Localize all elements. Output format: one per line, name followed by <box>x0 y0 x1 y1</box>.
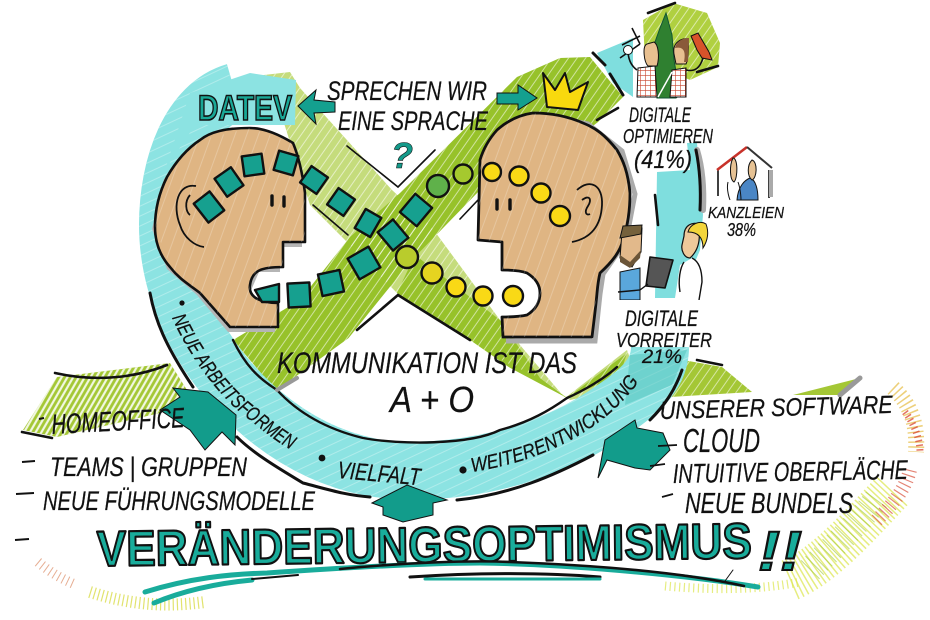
right head <box>478 113 635 341</box>
ribbon labels <box>172 300 637 491</box>
DATEV logo: DATEV <box>198 89 293 128</box>
left head nostrils <box>272 196 284 206</box>
text: digital pioneers: DIGITALE <box>625 306 698 331</box>
ribbon labels: WEITERENTWICKLUNG <box>471 375 637 472</box>
right head nostrils <box>497 200 510 209</box>
crown <box>543 73 588 110</box>
right bullet list: NEUE BUNDELS <box>685 488 853 520</box>
left bullet list: HOMEOFFICE <box>51 402 185 440</box>
text: digital pioneers <box>616 306 712 368</box>
coloured hatching backdrop <box>38 388 920 605</box>
text: digital optimists <box>623 104 713 174</box>
right bullet list: CLOUD <box>683 422 760 459</box>
right bullet list: UNSERER SOFTWARE <box>659 391 893 425</box>
arrow right to crown <box>497 85 537 110</box>
ribbon labels: VIELFALT <box>336 457 423 491</box>
lumberjacks illustration: digital optimists <box>620 13 712 98</box>
title: !! <box>758 519 802 582</box>
left bullet list: NEUE FÜHRUNGSMODELLE <box>43 486 316 516</box>
heading question <box>327 76 489 136</box>
right arrow to further development <box>598 420 670 478</box>
text: digital pioneers: VORREITER <box>616 330 712 352</box>
right head ear <box>572 184 602 242</box>
light teal infinity ribbon <box>168 38 703 471</box>
left bullet list <box>15 402 316 540</box>
white centre of the lower X <box>277 295 567 438</box>
middle arrow to diversity <box>372 485 447 522</box>
text: digital optimists: DIGITALE <box>629 104 692 127</box>
title underline strokes <box>145 561 758 603</box>
large arrow to new ways of working <box>160 388 236 450</box>
left head ear <box>177 186 204 247</box>
right bullet list <box>650 391 909 520</box>
text: digital optimists: (41%) <box>634 146 692 174</box>
text: digital pioneers: 21% <box>641 347 682 368</box>
text: law firms: 38% <box>727 220 756 240</box>
DATEV logo <box>165 73 296 170</box>
ribbon labels: NEUE ARBEITSFORMEN <box>172 314 298 449</box>
central statement: A + O <box>388 379 474 420</box>
text: law firms: KANZLEIEN <box>708 205 784 222</box>
central statement: KOMMUNIKATION IST DAS <box>277 347 577 380</box>
yellow and green dots: right head's words <box>396 163 570 306</box>
teal question mark: ? <box>391 135 413 176</box>
left bullet list: TEAMS | GRUPPEN <box>50 452 247 482</box>
pioneers illustration: bearded man, tablet, woman <box>618 222 708 300</box>
text: law firms <box>708 205 784 240</box>
house illustration: law firms <box>717 147 772 200</box>
left head <box>152 128 305 332</box>
green X band and patches <box>23 3 860 437</box>
central statement <box>277 347 577 420</box>
text: digital optimists: OPTIMIEREN <box>623 126 713 148</box>
arrow left to DATEV <box>298 90 335 124</box>
white panel behind pioneers label <box>615 300 715 346</box>
ribbon ink edges <box>22 3 860 500</box>
heading question: SPRECHEN WIR <box>327 76 487 106</box>
title: VERÄNDERUNGSOPTIMISMUS <box>96 513 752 577</box>
heading question: EINE SPRACHE <box>338 106 489 136</box>
teal squares: left head's words <box>194 151 432 308</box>
